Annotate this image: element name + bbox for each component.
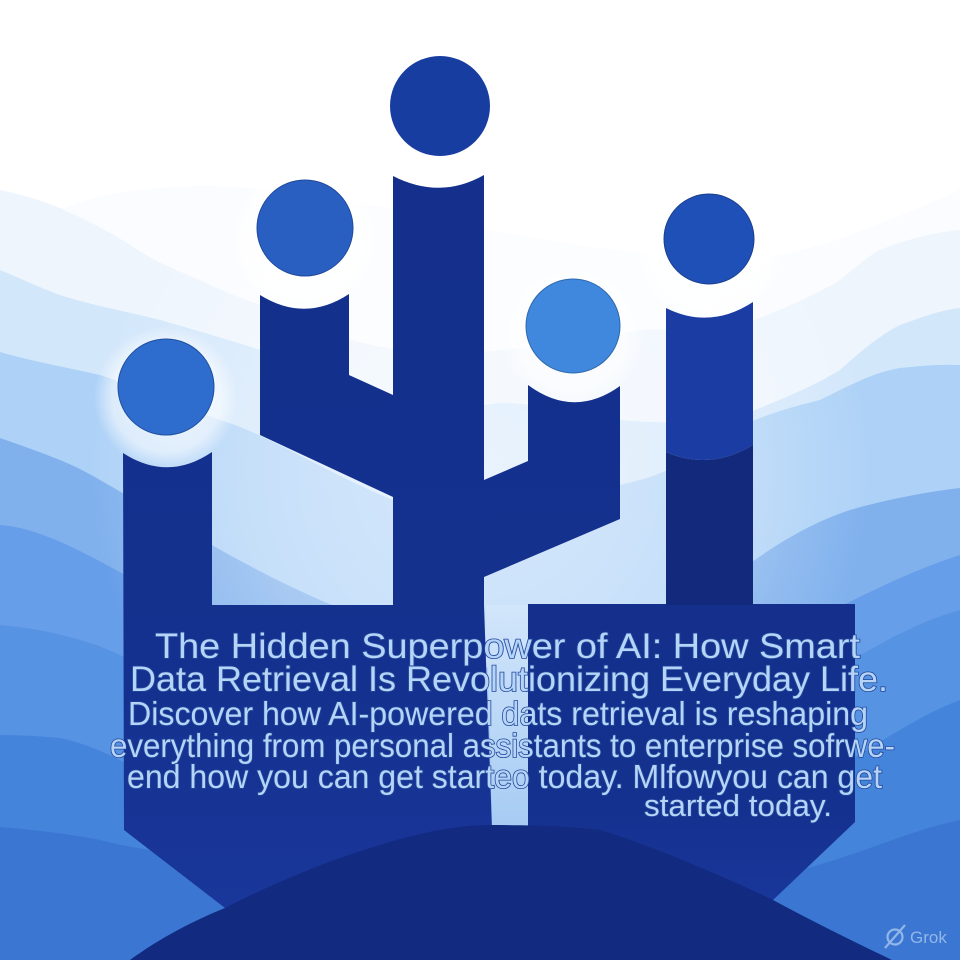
circle: left upper (257, 180, 353, 276)
light gap between the two lower blocks (486, 605, 528, 830)
title and description text: Data Retrieval Is Revolutionizing Everyday Life. (130, 660, 888, 699)
circle: right middle (526, 279, 620, 373)
right block (528, 604, 855, 900)
title and description text: everything from personal assistants to enterprise sofrwe- (110, 727, 895, 764)
watermark: Grok (885, 925, 947, 948)
title and description text: started today. (644, 788, 832, 823)
right column upper part (666, 302, 753, 460)
title and description text (110, 627, 895, 823)
title and description text: end how you can get starteo today. Mlfowyou can get (127, 758, 882, 795)
watermark: Grok: Grok (910, 928, 947, 947)
icon: Grok slash circle (885, 925, 905, 948)
title and description text: The Hidden Superpower of AI: How Smart (155, 627, 860, 666)
circle: far right (664, 194, 754, 284)
title and description text: Discover how AI-powered dats retrieval is reshaping (128, 695, 868, 732)
hill (130, 825, 892, 960)
light halos under the circles (94, 40, 783, 470)
circle: far left (118, 339, 214, 435)
cactus-like tree: left block and center trunk (123, 175, 620, 908)
right column darker lower part (666, 445, 753, 605)
circle: center top (390, 56, 490, 156)
